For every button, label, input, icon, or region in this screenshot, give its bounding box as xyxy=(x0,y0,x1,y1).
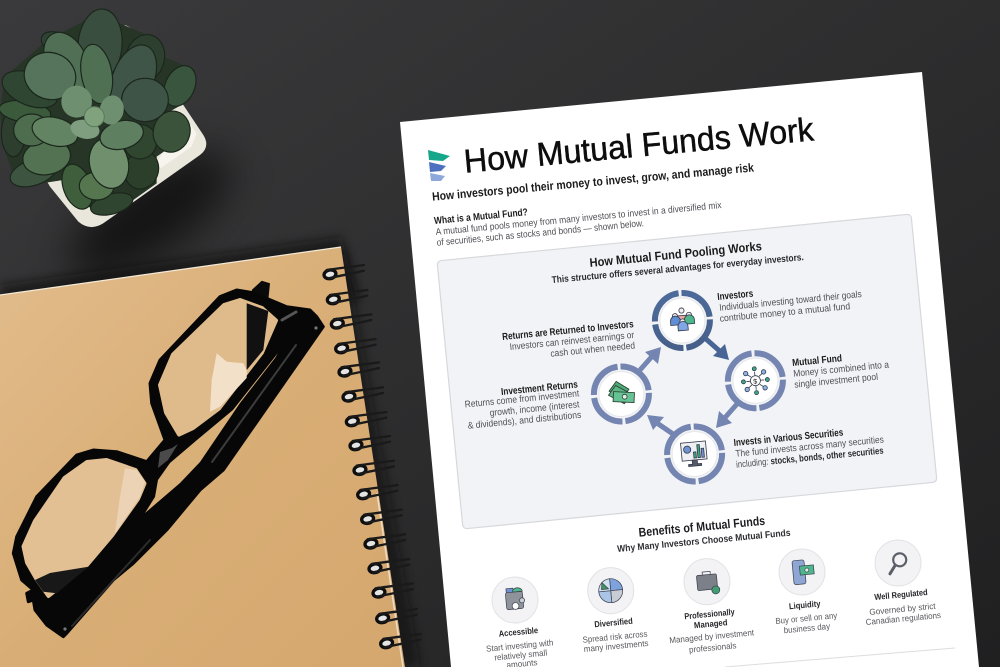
benefit: professionally managed: professionals xyxy=(689,640,737,655)
benefit: professionally managed xyxy=(669,557,755,655)
temple seen through upper lens xyxy=(247,303,268,370)
upper lens reflection xyxy=(210,353,247,412)
label: mutual fund xyxy=(792,353,890,391)
benefit: diversified xyxy=(582,566,649,654)
benefit: liquidity: Buy or sell on any xyxy=(775,610,838,626)
label: investment returns: & dividends), and distributions xyxy=(467,410,582,432)
label: securities xyxy=(733,427,885,471)
panel heading: How Mutual Fund Pooling Works xyxy=(589,239,762,270)
intro text block: A mutual fund pools money from many investors to invest in a diversified mix xyxy=(435,200,722,238)
subtitle: How investors pool their money to invest, grow, and manage risk xyxy=(432,160,755,204)
intro text block: What is a Mutual Fund? xyxy=(434,207,528,227)
benefit: well regulated: Canadian regulations xyxy=(865,610,941,627)
arrow: investors to mutual fund xyxy=(706,339,729,360)
benefit: diversified: many investments xyxy=(583,638,649,654)
icon: briefcase xyxy=(696,571,720,596)
benefit: diversified: Spread risk across xyxy=(582,629,648,645)
label: investors: contribute money to a mutual fund xyxy=(719,301,851,325)
panel: pooling diagram xyxy=(437,214,937,529)
gap between frame and folded temple xyxy=(145,353,278,513)
far temple tip xyxy=(252,281,270,300)
icon: pie chart xyxy=(598,578,624,604)
leaf mass xyxy=(0,10,195,215)
benefit: accessible: Accessible xyxy=(498,625,539,639)
benefits heading: Why Many Investors Choose Mutual Funds xyxy=(617,528,791,555)
label: returns to investors xyxy=(502,319,636,360)
benefit: well regulated xyxy=(865,538,941,627)
benefit: diversified: Diversified xyxy=(594,616,633,629)
benefit: accessible: Start investing with xyxy=(486,637,554,654)
benefit: liquidity: business day xyxy=(783,621,831,635)
node: investors xyxy=(652,291,712,350)
lower lens xyxy=(24,460,144,596)
label: securities: including: stocks, bonds, other securities xyxy=(736,446,884,471)
benefit: professionally managed: Managed xyxy=(694,617,728,630)
icon: money network: $ xyxy=(753,379,758,386)
label: investment returns: growth, income (interest xyxy=(489,399,580,419)
upper lens xyxy=(160,300,276,434)
label: returns to investors: Returns are Returned to Investors xyxy=(502,319,635,343)
arrow: mutual fund to securities xyxy=(716,404,737,428)
temple seen through lower lens xyxy=(35,567,88,593)
label: investment returns: Returns come from investment xyxy=(464,388,580,410)
label: returns to investors: Investors can reinvest earnings or xyxy=(509,330,635,353)
label: securities: The fund invests across many securities xyxy=(735,434,885,460)
benefit: professionally managed: Professionally xyxy=(684,607,735,621)
notebook spiral binding xyxy=(323,265,421,649)
icon: magnifier xyxy=(888,553,907,574)
label: investors xyxy=(717,289,862,325)
frame highlights xyxy=(72,312,296,626)
label: returns to investors: cash out when needed xyxy=(550,340,636,360)
paper sheet xyxy=(400,72,979,667)
arrow: securities to returns xyxy=(647,415,673,434)
label: investment returns: Investment Returns xyxy=(501,379,579,398)
benefit: accessible xyxy=(486,575,554,667)
intro text block: of securities, such as stocks and bonds — shown below. xyxy=(436,218,644,249)
benefit: professionally managed: Managed by investment xyxy=(669,627,755,645)
label: mutual fund: Money is combined into a xyxy=(793,359,890,380)
node: securities xyxy=(665,424,725,484)
icon: wallet xyxy=(505,587,525,610)
label: securities: Invests in Various Securities xyxy=(733,427,844,449)
lower lens reflection xyxy=(115,468,145,533)
label: mutual fund: single investment pool xyxy=(794,372,879,391)
benefit: liquidity xyxy=(775,547,838,635)
pot shadow xyxy=(50,129,250,301)
label: mutual fund: Mutual Fund xyxy=(792,353,843,369)
node: investment returns xyxy=(591,364,651,424)
icon: monitor chart xyxy=(681,441,708,467)
title: How Mutual Funds Work xyxy=(462,110,816,180)
benefit: accessible: relatively small xyxy=(494,648,548,662)
frame silhouette xyxy=(13,290,323,637)
notebook xyxy=(0,237,420,667)
benefit: well regulated: Well Regulated xyxy=(874,587,928,602)
label: investors: Investors xyxy=(717,289,754,303)
potted succulent xyxy=(0,7,206,227)
label: investors: Individuals investing toward their goals xyxy=(719,289,862,314)
benefit: liquidity: Liquidity xyxy=(789,598,821,611)
panel subheading: This structure offers several advantages for everyday investors. xyxy=(551,252,804,286)
icon: banknotes xyxy=(607,380,635,405)
paper contents xyxy=(428,110,955,667)
intro text block xyxy=(434,200,722,249)
label: investment returns xyxy=(464,379,582,432)
arrow: returns to investors xyxy=(640,347,661,370)
benefit: well regulated: Governed by strict xyxy=(869,601,937,617)
node: mutual fund xyxy=(725,351,785,411)
pot xyxy=(2,25,206,227)
eyeglasses xyxy=(13,281,323,637)
logo xyxy=(428,150,450,181)
icon: phone and cash xyxy=(792,559,815,585)
benefits heading xyxy=(617,514,791,555)
icon: people xyxy=(669,307,695,332)
benefits heading: Benefits of Mutual Funds xyxy=(638,514,766,540)
